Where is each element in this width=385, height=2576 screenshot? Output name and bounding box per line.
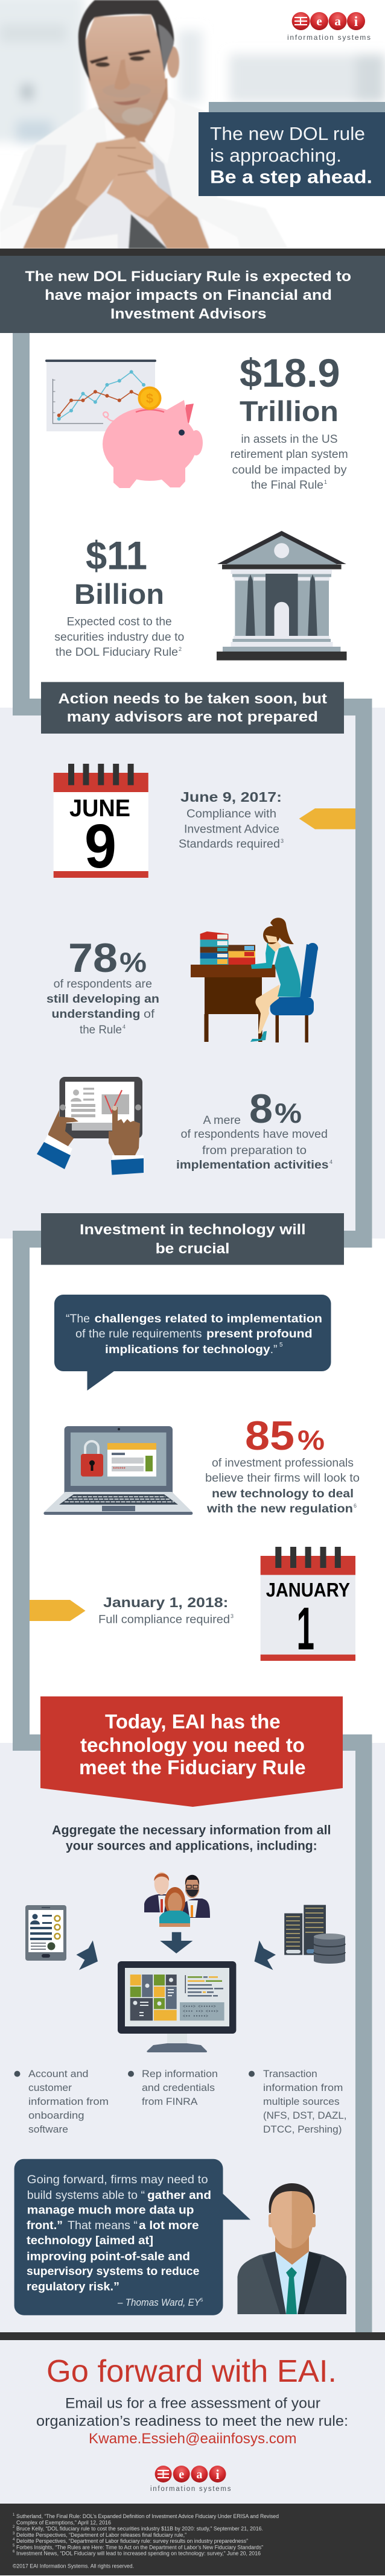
stat: 78 percent: the Rule: [80, 1024, 122, 1036]
stat: $11 billion: the DOL Fiduciary Rule: [56, 646, 178, 659]
footer: references: Bruce Kelly, “DOL fiduciary rule to cost the securities industry $11B by 2020: study,” September 21, 2016.: [16, 2525, 263, 2533]
stat: 85 percent: with the new regulation: [206, 1503, 353, 1515]
icon: group of people: [144, 1872, 210, 1927]
stat: 85 percent: 85: [245, 1413, 294, 1459]
speech bubble: Thomas Ward quote: [14, 2159, 250, 2315]
bullet: rep information: from FINRA: [142, 2096, 198, 2107]
speech bubble: challenges quote: challenges related to implementation: [95, 1313, 322, 1325]
logo: EAI information systems: information systems: [287, 33, 371, 42]
bullet: transaction information: information from: [263, 2082, 343, 2093]
footer: references: 2: [13, 2525, 15, 2529]
footer: references: Sutherland, “The Final Rule: DOL’s Expanded Definition of Investment Advice Fiduciary Under ERISA and Revised: [16, 2513, 279, 2520]
text: January 1, 2018 compliance: January 1, 2018:: [103, 1594, 228, 1610]
neck: [98, 78, 168, 142]
speech bubble: Thomas Ward quote: gather and: [147, 2189, 211, 2202]
stat: $11 billion: $11: [86, 533, 147, 578]
call to action: go forward with EAI: organization’s readiness to meet the new rule:: [36, 2413, 348, 2429]
speech bubble: Thomas Ward quote: a lot more: [139, 2219, 199, 2232]
icon: January 1 calendar: JANUARY: [266, 1579, 350, 1601]
speech bubble: Thomas Ward quote: manage much more data up: [27, 2204, 194, 2216]
stat: $18.9 trillion: in assets in the US: [241, 433, 338, 446]
callout: the new DOL rule: [199, 102, 385, 196]
stat: $11 billion: [54, 533, 184, 659]
bullet: account and customer information: software: [28, 2124, 68, 2135]
icon: desktop monitor: <••• ••> <•••>: [183, 2010, 218, 2014]
stat: $18.9 trillion: Trillion: [240, 395, 339, 427]
speech bubble: Thomas Ward quote: build systems able to “: [27, 2189, 145, 2202]
stat: $18.9 trillion: could be impacted by: [232, 464, 347, 477]
speech bubble: challenges quote: 5: [279, 1342, 283, 1348]
logo: EAI footer: [150, 2466, 231, 2493]
icon: desktop monitor: <•••> <•••••>: [183, 2005, 216, 2010]
text: June 9, 2017 compliance: June 9, 2017:: [180, 789, 282, 805]
stat: $18.9 trillion: $18.9: [240, 351, 340, 395]
heading panel: major impacts: Investment Advisors: [110, 306, 267, 322]
call to action: go forward with EAI: Kwame.Essieh@eaiinfosys.com: [89, 2431, 297, 2447]
stat: 85 percent: 6: [354, 1503, 357, 1509]
stat: 78 percent: %: [119, 947, 147, 978]
text: January 1, 2018 compliance: Full compliance required: [98, 1614, 230, 1626]
speech bubble: challenges quote: .”: [270, 1344, 278, 1356]
logo: EAI footer: e: [179, 2468, 184, 2481]
bullet: account and customer information: [14, 2068, 109, 2135]
stat: 8 percent: 4: [329, 1159, 332, 1165]
footer: references: 3: [13, 2532, 15, 2536]
heading panel: action needs to be taken soon: many advisors are not prepared: [67, 709, 318, 725]
icon: man in suit: [238, 2183, 346, 2314]
arrow: yellow marker pointing left: [299, 808, 355, 829]
icon: piggy bank with coin: [103, 386, 203, 488]
arrow: down from people to monitor: [160, 1932, 192, 1953]
stat: 8 percent: from preparation to: [202, 1144, 307, 1157]
footer: references: 6: [13, 2550, 15, 2554]
icon: bank building: [217, 531, 346, 661]
bullet: transaction information: multiple sources: [263, 2096, 340, 2107]
icon: January 1 calendar: [261, 1547, 355, 1663]
heading panel: major impacts: The new DOL Fiduciary Rule is expected to: [25, 268, 351, 285]
eyes and brows: [89, 56, 108, 64]
speech bubble: Thomas Ward quote: improving point-of-sale and: [27, 2250, 190, 2264]
stat: 78 percent: [46, 935, 159, 1036]
bullet: rep information: and credentials: [142, 2082, 215, 2093]
footer: references: Complex of Exemptions,” April 12, 2016: [16, 2519, 111, 2527]
speech bubble: Thomas Ward quote: That means “: [68, 2219, 138, 2232]
stat: 85 percent: [205, 1413, 360, 1515]
footer: references: ©2017 EAI Information Systems. All rights reserved.: [13, 2563, 134, 2570]
speech bubble: Thomas Ward quote: regulatory risk.”: [27, 2281, 119, 2294]
logo: EAI information systems: e: [316, 14, 322, 28]
stat: $11 billion: securities industry due to: [54, 631, 184, 644]
text: June 9, 2017 compliance: [179, 789, 284, 851]
subheading: aggregate information: Aggregate the necessary information from all: [52, 1823, 331, 1838]
speech bubble: challenges quote: of the rule requirements: [75, 1328, 202, 1340]
bullet: transaction information: (NFS, DST, DAZL,: [263, 2110, 346, 2121]
tie: [129, 214, 167, 249]
footer: references: Investment News, “DOL Fiduciary will lead to increased spending on technology: survey,” June 20, 2016: [16, 2551, 261, 2557]
heading panel: investment in technology: [41, 1213, 344, 1265]
speech bubble: Thomas Ward quote: front.”: [27, 2219, 63, 2232]
footer: references: 4: [13, 2538, 15, 2542]
bullet: rep information: [128, 2068, 218, 2107]
banner: Today EAI has the technology: Today, EAI has the: [105, 1710, 281, 1733]
logo: EAI footer: information systems: [150, 2486, 231, 2493]
speech bubble: challenges quote: “The: [66, 1313, 90, 1325]
heading panel: major impacts: [0, 249, 385, 333]
bullet: account and customer information: onboarding: [28, 2110, 84, 2121]
stat: 85 percent: new technology to deal: [212, 1488, 354, 1500]
logo: EAI footer: a: [196, 2468, 202, 2481]
stat: 8 percent: of respondents have moved: [181, 1128, 328, 1141]
stat: $18.9 trillion: the Final Rule: [251, 479, 323, 492]
icon: laptop with lock: ******: [113, 1466, 126, 1472]
bullet: account and customer information: Account and: [28, 2068, 88, 2080]
logo: EAI information systems: a: [334, 14, 341, 28]
heading panel: investment in technology: Investment in technology will: [80, 1222, 306, 1238]
stat: 78 percent: 78: [68, 935, 118, 981]
speech bubble: Thomas Ward quote: Going forward, firms may need to: [27, 2174, 208, 2186]
call to action: go forward with EAI: Email us for a free assessment of your: [65, 2396, 320, 2412]
icon: June 9 calendar: JUNE: [69, 795, 130, 822]
footer: references: 1: [13, 2513, 15, 2517]
collars: [144, 99, 168, 141]
stat: $18.9 trillion: [231, 351, 348, 492]
logo: EAI information systems: i: [354, 14, 358, 29]
stat: 78 percent: understanding: [52, 1008, 141, 1021]
speech bubble: Thomas Ward quote: supervisory systems to reduce: [27, 2265, 199, 2278]
left forearm and hand: [22, 144, 97, 249]
mouth: [113, 98, 141, 105]
heading panel: major impacts: have major impacts on Financial and: [45, 287, 332, 303]
icon: servers and database: [284, 1905, 345, 1964]
stat: 8 percent: 8: [249, 1086, 273, 1132]
text: January 1, 2018 compliance: 3: [231, 1613, 234, 1619]
stat: $11 billion: Billion: [74, 578, 164, 610]
bullet: transaction information: [249, 2068, 346, 2135]
speech bubble: challenges quote: implications for technology: [105, 1344, 270, 1356]
footer: references: Deloitte Perspectives, “Department of Labor releases final fiduciary rule,”: [16, 2532, 186, 2539]
stat: $18.9 trillion: retirement plan system: [231, 448, 348, 461]
stat: 85 percent: believe their firms will look to: [205, 1472, 360, 1485]
stat: 8 percent: implementation activities: [176, 1159, 328, 1172]
subheading: aggregate information: [52, 1823, 331, 1853]
footer: references: [0, 2504, 385, 2575]
callout: the new DOL rule: is approaching.: [210, 145, 342, 166]
stat: 78 percent: still developing an: [46, 993, 159, 1006]
icon: June 9 calendar: 9: [84, 811, 116, 881]
ear: [167, 46, 179, 78]
stat: 8 percent: %: [275, 1097, 302, 1129]
bullet: rep information: Rep information: [142, 2068, 218, 2080]
timeline connector bars: [13, 333, 372, 2332]
footer: references: Deloitte Perspectives, “Department of Labor fiduciary rule: survey results on industry preparedness”: [16, 2538, 248, 2545]
icon: laptop with lock: [43, 1426, 192, 1515]
heading panel: action needs to be taken soon: Action needs to be taken soon, but: [58, 691, 327, 707]
shirt: [0, 97, 288, 249]
stat: $11 billion: 2: [179, 646, 182, 652]
banner: Today EAI has the technology: technology you need to: [80, 1734, 305, 1756]
stat: $18.9 trillion: 1: [324, 479, 327, 485]
stat: 78 percent: 4: [122, 1024, 126, 1030]
speech bubble: challenges quote: [54, 1295, 331, 1391]
right forearm and hand: [132, 188, 210, 249]
text: January 1, 2018 compliance: [98, 1594, 234, 1626]
text: June 9, 2017 compliance: 3: [281, 838, 284, 844]
icon: piggy bank with coin: $: [146, 391, 153, 406]
icon: tablet with hands: [37, 1077, 144, 1175]
banner: Today EAI has the technology: [40, 1696, 343, 1807]
text: June 9, 2017 compliance: Compliance with: [186, 808, 276, 820]
arrow: from tablet to monitor: [76, 1940, 98, 1970]
stat: 85 percent: of investment professionals: [212, 1457, 354, 1470]
call to action: go forward with EAI: [36, 2354, 348, 2447]
text: June 9, 2017 compliance: Standards required: [179, 838, 280, 851]
dark divider bar: [0, 2332, 385, 2340]
logo: EAI information systems: [287, 12, 371, 42]
bullet: account and customer information: information from: [28, 2096, 109, 2107]
icon: January 1 calendar: 1: [297, 1595, 314, 1663]
arrow: yellow marker pointing right: [30, 1600, 86, 1621]
icon: June 9 calendar: [54, 764, 148, 881]
banner: Today EAI has the technology: meet the Fiduciary Rule: [79, 1756, 306, 1778]
speech bubble: challenges quote: present profound: [206, 1328, 313, 1340]
bullet: account and customer information: customer: [28, 2082, 72, 2093]
heading panel: investment in technology: be crucial: [156, 1241, 229, 1257]
speech bubble: Thomas Ward quote: technology [aimed at]: [27, 2235, 153, 2247]
footer: references: 5: [13, 2544, 15, 2548]
icon: woman at desk with binders: [191, 918, 318, 1042]
stat: 8 percent: [176, 1086, 332, 1172]
speech bubble: Thomas Ward quote: – Thomas Ward, EY: [117, 2297, 201, 2308]
speech bubble: Thomas Ward quote: 5: [200, 2297, 203, 2303]
hero photo: businessman: [0, 0, 385, 249]
subheading: aggregate information: your sources and applications, including:: [66, 1839, 317, 1853]
icon: desktop monitor: [118, 1961, 236, 2052]
icon: desktop monitor: <•• •••••>: [183, 2014, 208, 2019]
footer: references: Forbes Insights, “The Rules are Here: Time to Act on the Department of Labor’s New Fiduciary Standards”: [16, 2545, 263, 2551]
stat: $11 billion: Expected cost to the: [67, 615, 172, 629]
icon: line chart board: [45, 360, 156, 431]
logo: EAI footer: i: [215, 2467, 220, 2482]
arrow: from servers to monitor: [255, 1940, 276, 1970]
stat: 85 percent: %: [298, 1424, 325, 1456]
icon: tablet source: [25, 1905, 66, 1961]
bullet: transaction information: Transaction: [263, 2068, 317, 2080]
hair: [78, 0, 174, 81]
text: June 9, 2017 compliance: Investment Advice: [184, 823, 279, 836]
stat: 78 percent: of respondents are: [54, 978, 152, 991]
face: [86, 15, 166, 125]
callout: the new DOL rule: Be a step ahead.: [210, 167, 372, 187]
bullet: transaction information: DTCC, Pershing): [263, 2124, 342, 2135]
callout: the new DOL rule: The new DOL rule: [210, 123, 365, 144]
stat: 78 percent: of: [144, 1008, 155, 1021]
heading panel: action needs to be taken soon: [41, 682, 344, 734]
call to action: go forward with EAI: Go forward with EAI.: [46, 2354, 337, 2389]
stat: 8 percent: A mere: [203, 1114, 241, 1127]
